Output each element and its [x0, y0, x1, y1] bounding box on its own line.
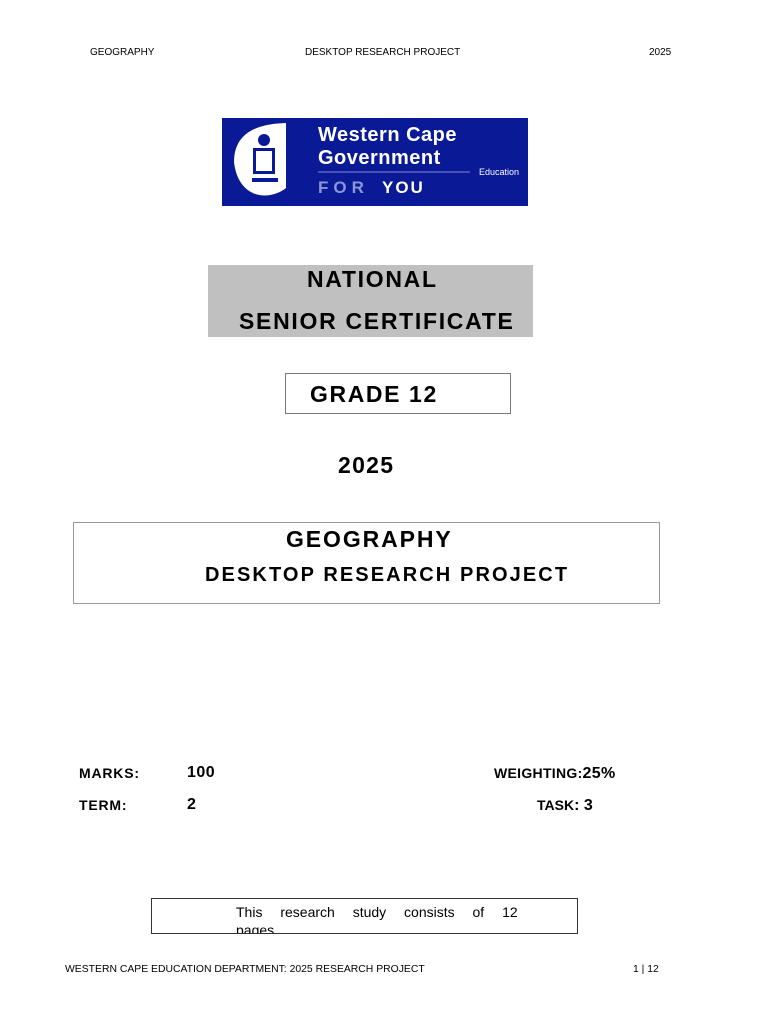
footer: 1 | 12: [633, 964, 659, 975]
subject box: GEOGRAPHY: [286, 526, 453, 552]
title box: NSC: [208, 265, 533, 337]
note box: This research study consists of 12: [236, 904, 518, 920]
marks info: WEIGHTING:25%: [494, 765, 615, 782]
grade box: GRADE 12: [310, 381, 438, 407]
note box: [151, 898, 578, 934]
footer: WESTERN CAPE EDUCATION DEPARTMENT: 2025 RESEARCH PROJECT: [65, 964, 425, 975]
logo: Education: [479, 167, 519, 177]
marks info: TERM:: [79, 797, 127, 813]
marks info: 100: [187, 764, 215, 781]
logo: YOU: [382, 178, 425, 197]
logo: Western Cape: [318, 124, 457, 146]
title box: NSC: NATIONAL: [307, 266, 438, 292]
header: 2025: [649, 47, 671, 58]
subject box: [73, 522, 660, 604]
grade box: [285, 373, 511, 414]
year: 2025: [338, 452, 394, 478]
header: [90, 47, 671, 58]
logo: FOR: [318, 178, 369, 197]
header: DESKTOP RESEARCH PROJECT: [305, 47, 460, 58]
header: GEOGRAPHY: [90, 47, 154, 58]
logo: Government: [318, 147, 441, 169]
icon: crest: [234, 123, 286, 195]
title box: NSC: SENIOR CERTIFICATE: [239, 308, 515, 334]
logo: [222, 118, 528, 206]
marks info: TASK: 3: [537, 797, 593, 814]
marks info: [79, 764, 615, 814]
marks info: MARKS:: [79, 765, 140, 781]
marks info: 2: [187, 796, 196, 813]
subject box: DESKTOP RESEARCH PROJECT: [205, 564, 569, 586]
footer: [65, 964, 659, 975]
